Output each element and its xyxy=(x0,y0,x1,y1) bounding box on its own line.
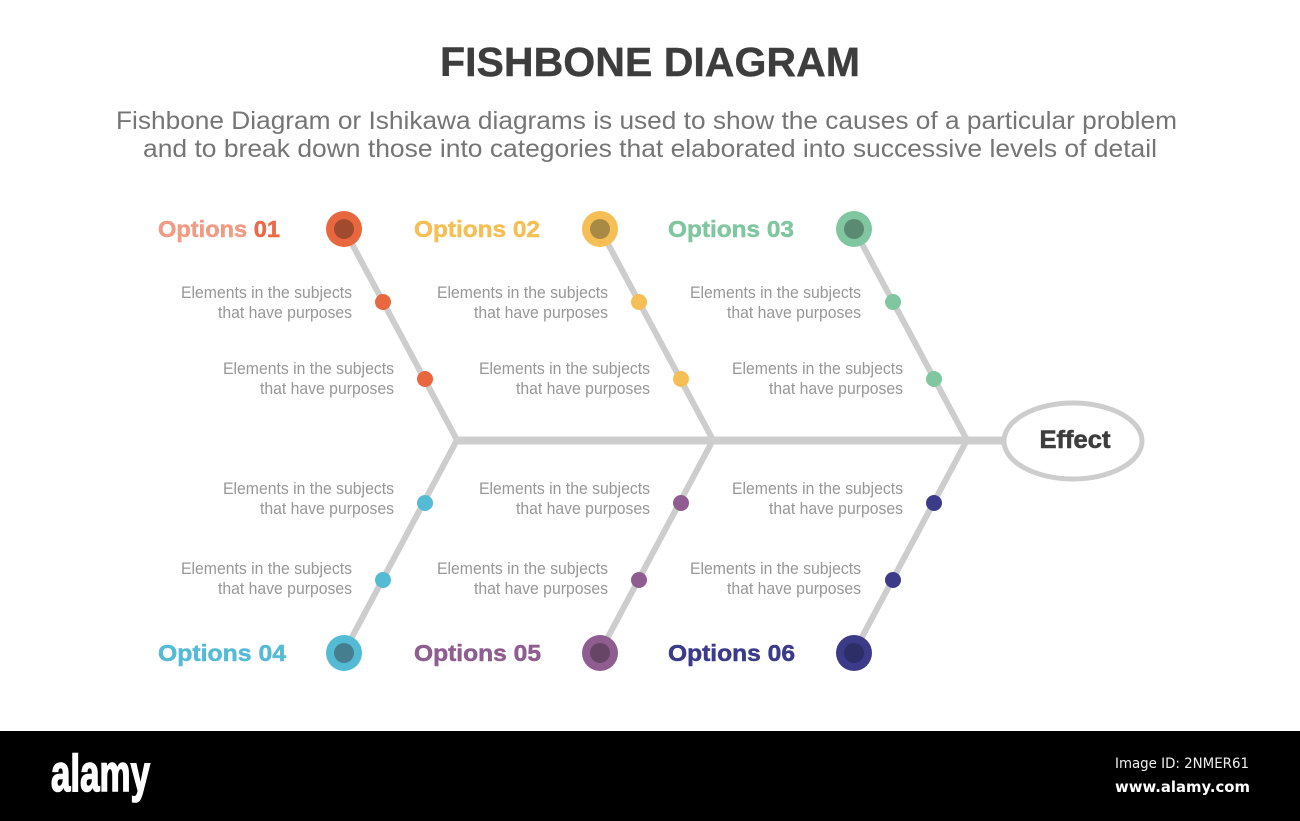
panel: options 02: that have purposes xyxy=(516,380,650,398)
panel: options 02: Options 02 xyxy=(414,216,540,242)
panel: options 03 xyxy=(668,211,942,398)
panel: options 03: Options 03 xyxy=(668,216,794,242)
panel: options 04 xyxy=(158,480,433,671)
watermark bar xyxy=(0,731,1300,821)
panel: options 04: that have purposes xyxy=(260,500,394,518)
title: FISHBONE DIAGRAM xyxy=(440,39,860,85)
panel: options 04: Elements in the subjects xyxy=(223,480,394,498)
panel: options 05: that have purposes xyxy=(474,580,608,598)
subtitle: Fishbone Diagram or Ishikawa diagrams is used to show the causes of a particular problem xyxy=(116,107,1177,135)
panel: options 01: Elements in the subjects xyxy=(223,360,394,378)
panel: options 03: that have purposes xyxy=(769,380,903,398)
panel: options 06: Options 06 xyxy=(668,640,795,666)
panel: options 05: Elements in the subjects xyxy=(437,560,608,578)
panel: options 06: Elements in the subjects xyxy=(690,560,861,578)
panel: options 01: that have purposes xyxy=(218,304,352,322)
panel: options 05: Elements in the subjects xyxy=(479,480,650,498)
panel: options 01: Elements in the subjects xyxy=(181,284,352,302)
effect node xyxy=(1004,403,1142,479)
panel: options 03: that have purposes xyxy=(727,304,861,322)
panel: options 02 xyxy=(414,211,689,398)
panel: options 06: Elements in the subjects xyxy=(732,480,903,498)
panel: options 03: Elements in the subjects xyxy=(732,360,903,378)
fishbone skeleton xyxy=(344,229,1006,652)
panel: options 02: that have purposes xyxy=(474,304,608,322)
panel: options 02: Elements in the subjects xyxy=(479,360,650,378)
effect node: Effect xyxy=(1040,426,1111,454)
watermark bar: Image ID: 2NMER61 xyxy=(1115,756,1249,772)
panel: options 02: Elements in the subjects xyxy=(437,284,608,302)
watermark bar: www.alamy.com xyxy=(1115,778,1250,796)
panel: options 01: that have purposes xyxy=(260,380,394,398)
panel: options 05: that have purposes xyxy=(516,500,650,518)
panel: options 06: that have purposes xyxy=(727,580,861,598)
panel: options 06 xyxy=(668,480,942,671)
panel: options 04: Elements in the subjects xyxy=(181,560,352,578)
subtitle xyxy=(116,107,1177,163)
panel: options 05 xyxy=(414,480,689,671)
watermark bar: alamy xyxy=(51,745,150,803)
panel: options 06: that have purposes xyxy=(769,500,903,518)
panel: options 05: Options 05 xyxy=(414,640,541,666)
subtitle: and to break down those into categories that elaborated into successive levels of detail xyxy=(143,135,1157,163)
panel: options 04: that have purposes xyxy=(218,580,352,598)
panel: options 01: Options 01 xyxy=(158,216,280,242)
panel: options 04: Options 04 xyxy=(158,640,286,666)
panel: options 03: Elements in the subjects xyxy=(690,284,861,302)
panel: options 01 xyxy=(158,211,433,398)
